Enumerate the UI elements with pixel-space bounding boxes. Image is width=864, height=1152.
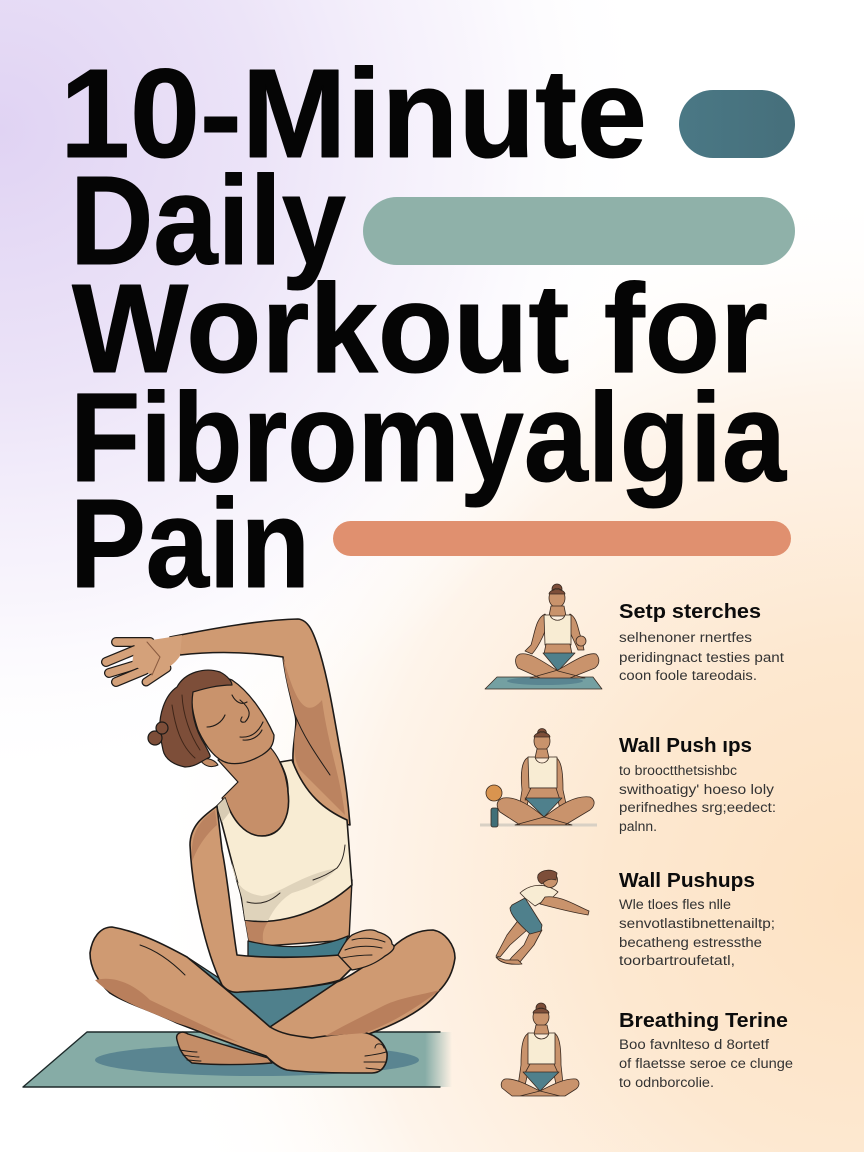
hair and bun xyxy=(148,670,232,767)
front leg and foot xyxy=(90,927,387,1073)
illustration: woman stretching on mat xyxy=(23,619,455,1087)
exercise 2 text: perifnedhes srg;eedect: xyxy=(619,800,776,815)
back leg and knee xyxy=(270,930,455,1039)
resting hand xyxy=(338,930,394,970)
exercise 3 text: becatheng estressthe xyxy=(619,935,762,950)
exercise 3 text: Wle tloes fles nlle xyxy=(619,897,731,912)
exercise 4 figure: breathing seated xyxy=(501,1003,579,1096)
title: Workout for xyxy=(72,258,768,399)
exercise 2 text: to brooctthetsishbc xyxy=(619,763,737,778)
raised arm xyxy=(170,619,350,825)
exercise 3 text xyxy=(619,870,775,968)
exercise 2 text xyxy=(619,735,776,834)
leg shading xyxy=(95,979,440,1043)
exercise 4 text xyxy=(619,1010,793,1090)
title: Pain xyxy=(70,473,310,614)
exercise 2 figure: seated with ball and bottle xyxy=(480,728,597,827)
exercise 3 text: toorbartroufetatl, xyxy=(619,953,735,968)
exercise 1 text: peridingnact testies pant xyxy=(619,650,784,665)
title: 10-Minute xyxy=(60,43,647,184)
sports bra top xyxy=(217,760,352,921)
exercise 4 text: to odnborcolie. xyxy=(619,1075,714,1090)
exercise 1 text: coon foole tareodais. xyxy=(619,668,757,683)
title xyxy=(60,43,787,614)
exercise 3 text: Wall Pushups xyxy=(619,870,755,892)
shoulder shading xyxy=(192,810,217,862)
exercise 1 text: selhenoner rnertfes xyxy=(619,630,752,645)
exercise 2 text: Wall Push ıps xyxy=(619,735,752,757)
title: Daily xyxy=(70,150,346,291)
waist shading xyxy=(245,920,268,945)
exercise 3 text: senvotlastibnettenailtp; xyxy=(619,916,775,931)
exercise 2 text: palnn. xyxy=(619,819,657,834)
decorative pill: dark teal xyxy=(679,90,795,158)
neck and chest xyxy=(218,745,289,836)
left arm and forearm xyxy=(190,806,352,992)
title: Fibromyalgia xyxy=(70,367,787,508)
exercise 1 text xyxy=(619,601,784,683)
decorative pill: sage xyxy=(363,197,795,265)
hand xyxy=(106,635,182,682)
exercise 2 text: swithoatigy' hoeso loly xyxy=(619,782,774,797)
exercise 1 text: Setp sterches xyxy=(619,601,761,623)
exercise 3 figure: leaning forward xyxy=(496,870,589,964)
decorative pill: salmon xyxy=(333,521,791,556)
back foot xyxy=(177,1032,272,1064)
exercise 4 text: Breathing Terine xyxy=(619,1010,788,1032)
exercise 4 text: Boo favnlteso d 8ortetf xyxy=(619,1037,769,1052)
head and face xyxy=(192,678,274,767)
waist xyxy=(240,880,352,947)
exercise 4 text: of flaetsse seroe ce clunge xyxy=(619,1056,793,1071)
yoga mat xyxy=(23,1032,453,1087)
shorts xyxy=(187,936,348,1027)
exercise 1 figure: seated with mat xyxy=(485,584,602,689)
